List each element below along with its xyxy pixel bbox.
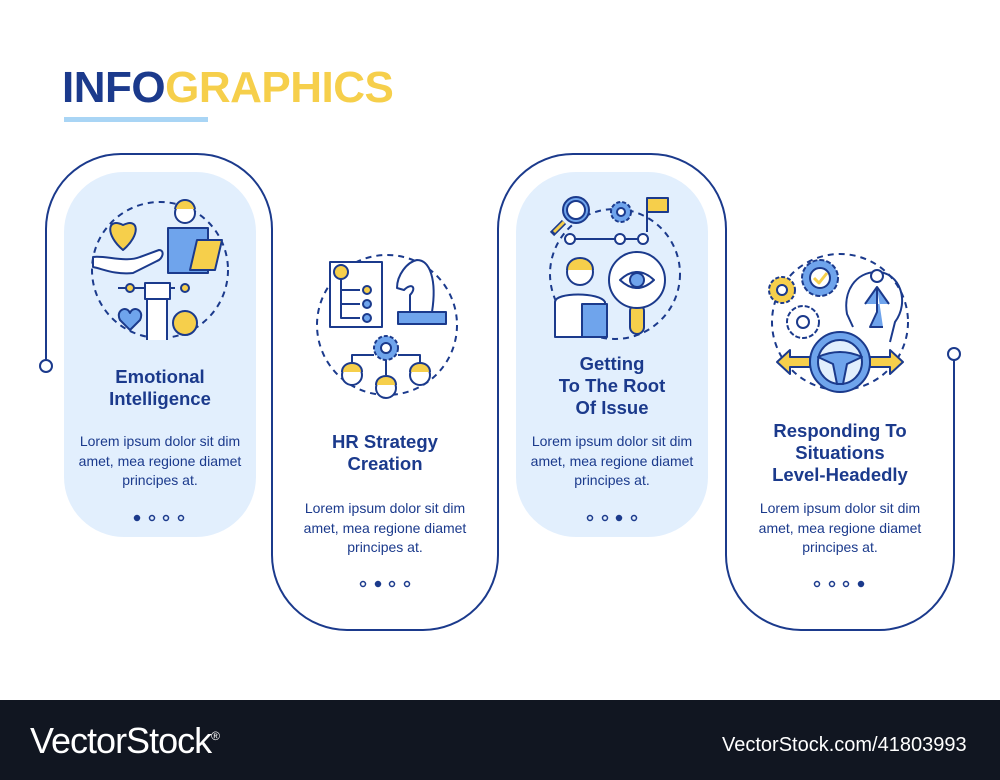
body: 2: amet, mea regione diamet [304,520,466,536]
panel fill: 3 [516,172,708,537]
heading: hr strategy [332,431,438,474]
footer url: VectorStock.com/41803993 [722,734,967,756]
body: 1: principes at. [122,472,198,488]
heading: level-headed [772,420,908,485]
heading: root of issue: Getting [580,353,644,374]
body: 4: amet, mea regione diamet [759,520,921,536]
footer bar [0,700,1000,780]
heading: level-headed: Responding To [773,420,907,441]
pager dots 3 [586,514,638,522]
body: 1 [79,433,242,488]
body: 3: Lorem ipsum dolor sit dim [532,433,692,449]
heading: root of issue [558,353,666,418]
body: 1: Lorem ipsum dolor sit dim [80,433,240,449]
panel fill: 1 [64,172,256,537]
body: 1: amet, mea regione diamet [79,452,241,468]
pager dots 1 [134,514,184,522]
body: 3: principes at. [574,472,650,488]
heading: emotional intelligence: Emotional [115,366,205,387]
body: 2: Lorem ipsum dolor sit dim [305,500,465,516]
heading: emotional intelligence: Intelligence [109,388,211,409]
body: 2 [304,500,466,555]
heading: hr strategy: HR Strategy [332,431,438,452]
body: 3 [531,433,694,488]
heading: root of issue: Of Issue [576,397,648,418]
body: 2: principes at. [347,539,423,555]
icon: hr strategy [316,254,458,399]
heading: level-headed: Level-Headedly [772,464,908,485]
body: 4: Lorem ipsum dolor sit dim [760,500,920,516]
icon: emotional intelligence [91,199,229,340]
body: 4 [759,500,922,555]
pager dots 2 [360,580,410,588]
icon: level-headed [768,253,909,393]
pager dots 4 [814,580,864,588]
title: INFOGRAPHICS [62,63,393,112]
heading: emotional intelligence [109,366,211,409]
heading: level-headed: Situations [795,442,885,463]
footer logo: VectorStock® [30,720,219,761]
icon: root of issue [549,196,681,340]
body: 4: principes at. [802,539,878,555]
heading: root of issue: To The Root [559,375,665,396]
heading: hr strategy: Creation [347,453,423,474]
title underline [64,117,208,122]
body: 3: amet, mea regione diamet [531,452,693,468]
